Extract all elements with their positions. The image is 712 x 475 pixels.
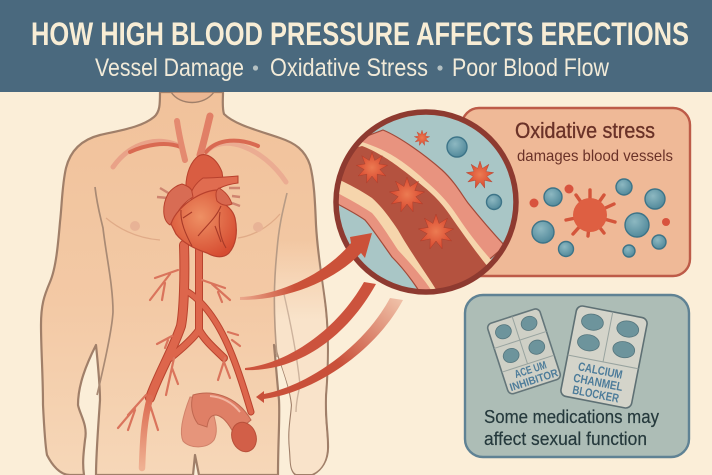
vessel outer wall — [338, 129, 503, 290]
header banner — [0, 0, 712, 92]
pack label — [505, 357, 560, 394]
blue particles — [447, 137, 502, 210]
aorta and iliac branches — [150, 245, 251, 412]
heart — [157, 155, 240, 257]
blister pack: ACE inhibitor — [486, 308, 562, 395]
vessel inner lining — [339, 142, 491, 290]
highlight — [210, 396, 240, 412]
coronary vessels — [181, 206, 226, 248]
pack label: INHIBITOR — [508, 367, 560, 394]
molecules illustration — [532, 179, 666, 257]
nipples — [130, 221, 140, 231]
subtitle: Oxidative Stress — [270, 54, 428, 82]
shaft — [192, 393, 251, 434]
pack label: BLOCKER — [571, 383, 620, 406]
vessel lumen — [342, 146, 486, 289]
left atrium — [164, 184, 193, 225]
vena cava — [176, 158, 184, 188]
red oxidative stars — [356, 130, 494, 249]
subtitle: Vessel Damage — [95, 54, 244, 82]
subtitle — [95, 54, 610, 82]
free radical — [566, 190, 615, 236]
arm and chest contours — [95, 187, 113, 395]
arrow: back to pelvis — [256, 298, 403, 403]
medications caption: affect sexual function — [484, 428, 647, 449]
right arm highlight — [274, 240, 327, 474]
pack label: ACE UM — [513, 359, 548, 381]
arrow: middle — [245, 282, 376, 370]
panel subheading: damages blood vessels — [517, 148, 673, 165]
right atrium — [216, 188, 232, 205]
lower sac — [181, 397, 216, 447]
pack label — [570, 359, 626, 406]
magnified vessel lens — [330, 112, 516, 310]
panel: medications — [465, 295, 689, 457]
lens background — [336, 112, 516, 292]
banner background — [0, 0, 712, 92]
pulmonary trunk — [190, 176, 238, 204]
medications caption: Some medications may — [484, 406, 660, 427]
small side branches — [118, 270, 240, 430]
pack label: CALCIUM — [577, 359, 624, 382]
body silhouette — [41, 92, 328, 475]
panel background — [465, 295, 689, 457]
arrow: abdomen into lens — [240, 233, 372, 300]
panel: oxidative stress — [462, 108, 690, 276]
subtitle: Poor Blood Flow — [452, 54, 610, 82]
panel heading: Oxidative stress — [515, 118, 655, 143]
arterial system — [113, 116, 286, 468]
lens ring — [336, 112, 516, 292]
panel background — [462, 108, 690, 276]
pack label: CHANMEL — [572, 371, 624, 394]
tip — [228, 419, 260, 455]
arrows to body — [245, 282, 403, 403]
aortic arch — [186, 155, 224, 198]
lower leg vessel — [142, 398, 150, 468]
human torso figure — [41, 92, 328, 475]
small red particles — [530, 184, 670, 226]
chin — [171, 92, 214, 102]
medications caption — [484, 406, 660, 449]
vessel outlines — [150, 245, 251, 412]
vessel stubs — [157, 188, 240, 206]
blister pack: calcium channel blocker — [560, 305, 648, 409]
upper vessels — [113, 141, 181, 167]
ventricles — [171, 190, 236, 257]
pelvic organ — [181, 393, 260, 455]
vessel cross section — [338, 129, 503, 290]
